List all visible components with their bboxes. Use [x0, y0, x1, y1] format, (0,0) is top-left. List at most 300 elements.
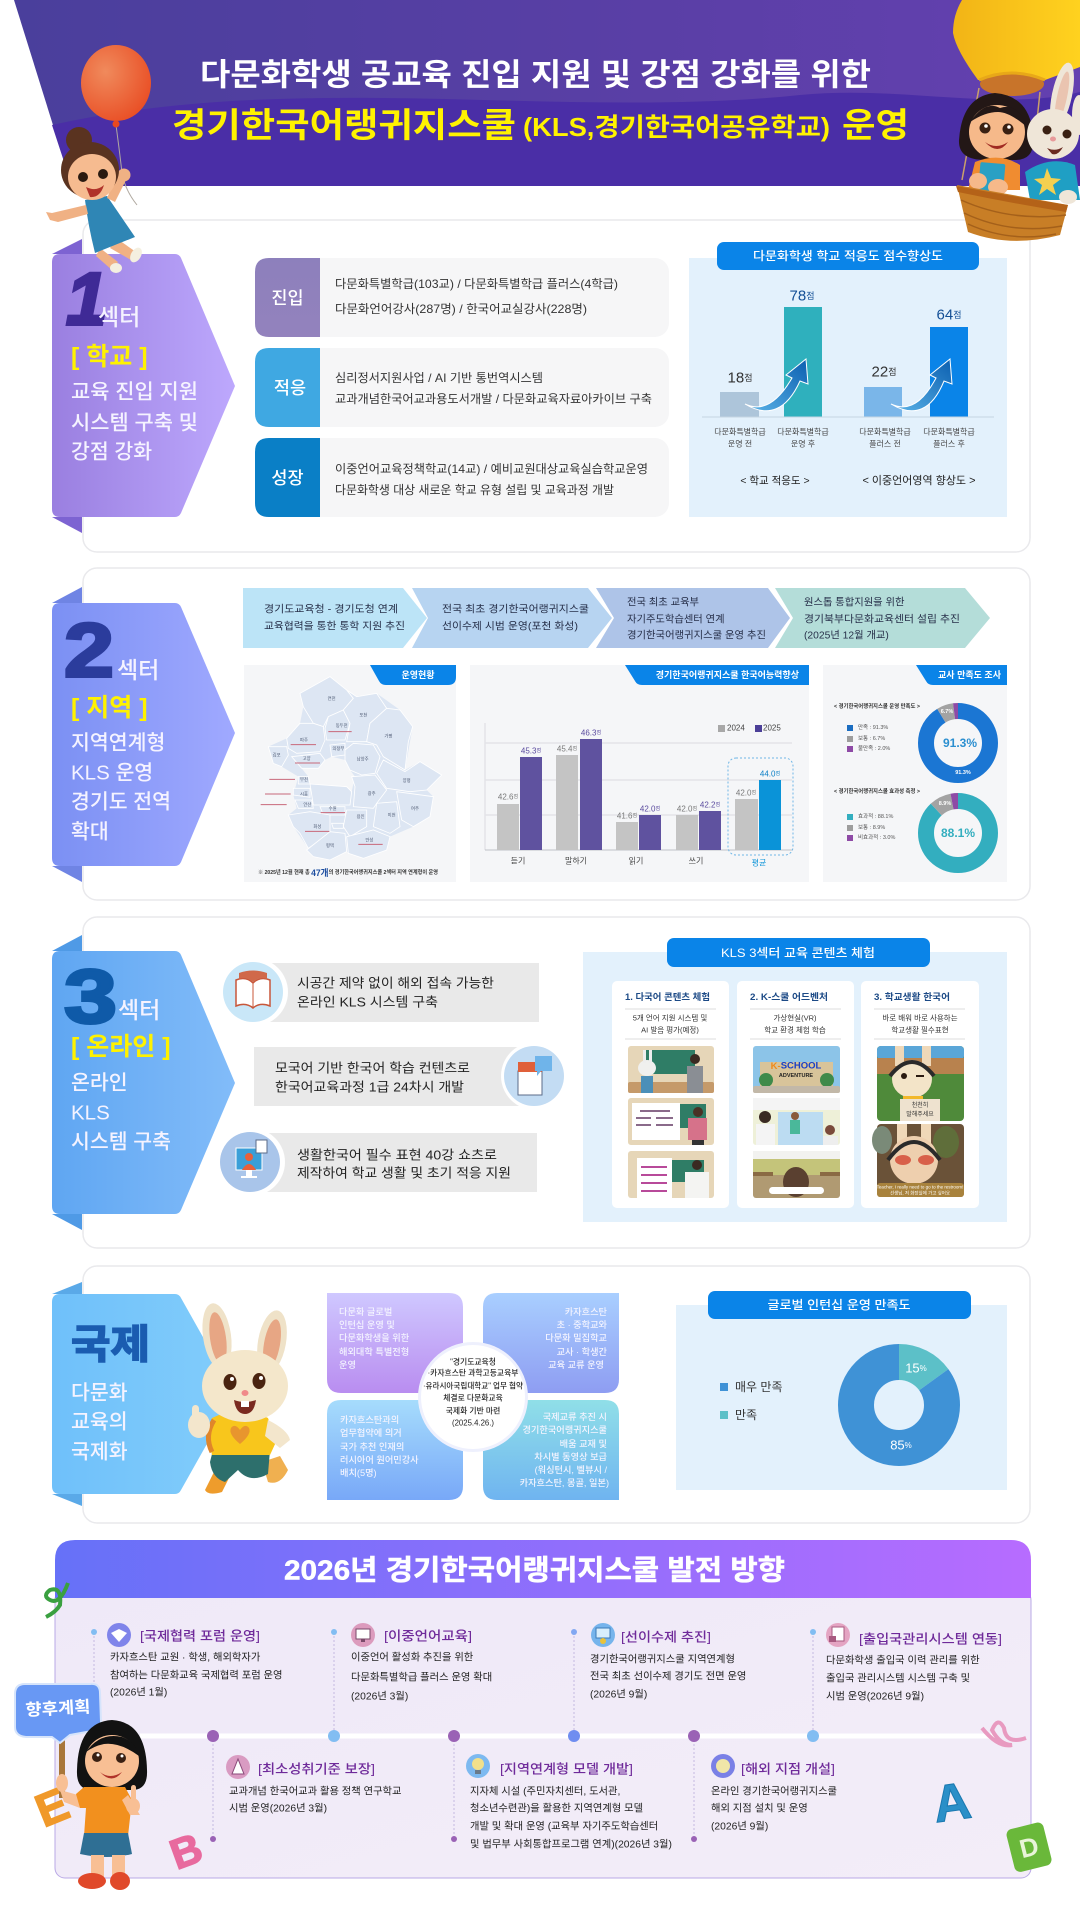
sign: future plan: [15, 1684, 101, 1798]
center agreement circle: (2025.4.26.): [452, 1418, 494, 1428]
short video 2: [872, 1124, 964, 1197]
map of Gyeonggi: 이천: [388, 811, 396, 818]
tag: [625, 665, 809, 685]
illustration: pink ribbon: [982, 1722, 1026, 1745]
quadrant: bottom right: [483, 1400, 619, 1500]
arrow: growth 1: [745, 359, 808, 411]
quadrant: top right: [483, 1293, 619, 1393]
illustration: balloon girl: [46, 45, 151, 273]
icon: box and chat: [518, 1056, 552, 1095]
bars: listening: [497, 746, 542, 866]
sector tag: [ 온라인 ]: [71, 1033, 171, 1061]
survey 1 heading: < 경기한국어랭귀지스쿨 운영 만족도 >: [834, 702, 921, 710]
sign: future plan: 향후계획: [25, 1697, 91, 1720]
panel title: KLS 3섹터 교육 콘텐츠 체험: [721, 945, 875, 960]
row: 진입: 다문화언어강사(287명) / 한국어교실강사(228명): [335, 302, 587, 316]
map of Gyeonggi: 가평: [384, 732, 392, 739]
map of Gyeonggi: 부천: [300, 776, 308, 783]
bars: average highlight: 평균: [752, 858, 766, 868]
bars: writing: [676, 800, 721, 866]
bars: speaking: 말하기: [565, 856, 587, 866]
bar labels: 다문화특별학급: [923, 426, 975, 436]
short video 1: 천천히: [912, 1101, 928, 1109]
sector description: [71, 732, 171, 844]
map of Gyeonggi: 연천: [328, 695, 336, 701]
survey 1 legend: 보통 : 6.7%: [858, 735, 885, 742]
panel: sector 2 card: [83, 568, 1030, 900]
plan: prerequisite: 전국 최초 선이수제 경기도 전면 운영: [590, 1670, 746, 1682]
quadrant: top right: 카자흐스탄: [565, 1307, 608, 1317]
quadrant: top right: 교사 · 학생간: [557, 1346, 608, 1357]
bar values: 22점: [872, 364, 896, 380]
sector 1 arrow label: [52, 239, 235, 533]
center agreement circle: ·카자흐스탄 과학고등교육부: [428, 1368, 518, 1378]
plan: forum: 참여하는 다문화교육 국제협력 포럼 운영: [110, 1668, 282, 1682]
game thumbnail 1: ADVENTURE: [779, 1073, 813, 1079]
sector description: KLS 운영: [71, 762, 153, 784]
chart captions: < 이중언어영역 향상도 >: [862, 474, 976, 487]
tag: 운영현황: [401, 669, 435, 680]
plan: prerequisite: [590, 1623, 746, 1700]
bar labels: 플러스 후: [933, 440, 965, 448]
sector number 1: 1: [66, 258, 107, 340]
chevron 1: [243, 588, 427, 648]
section header: 2026년 경기한국어랭귀지스쿨 발전 방향: [284, 1554, 785, 1586]
plan: immigration: [826, 1623, 1002, 1702]
quadrant diagram: [327, 1293, 619, 1500]
chevron 2: [412, 588, 612, 648]
bar values: [728, 288, 961, 386]
plan: bilingual: [이중언어교육]: [384, 1628, 472, 1644]
plan: forum: [국제협력 포럼 운영]: [140, 1628, 260, 1644]
quadrant: bottom left: 러시아어 원어민강사: [340, 1454, 419, 1465]
bars: reading: 41.6점: [617, 812, 637, 820]
bars: writing: 쓰기: [689, 856, 703, 866]
plan: regional model: 개발 및 확대 운영 (교육부 자기주도학습센터: [470, 1820, 658, 1832]
quadrant: bottom left: 국가 추천 인재의: [340, 1441, 404, 1452]
header banner: [14, 0, 1080, 186]
quadrant: bottom left: 카자흐스탄과의: [340, 1415, 399, 1425]
letter B block: B: [164, 1824, 208, 1878]
card 1: 5개 언어 지원 시스템 및: [633, 1012, 707, 1022]
card 2: 가상현실(VR): [773, 1012, 817, 1022]
bars: speaking: [556, 728, 602, 866]
quadrant: top right: 다문화 밀집학교: [545, 1332, 607, 1343]
center agreement circle: "경기도교육청: [450, 1356, 496, 1366]
chart title pill: [717, 242, 979, 270]
legend: 매우 만족: [735, 1380, 782, 1394]
chevron 1: 교육협력을 통한 통학 지원 추진: [264, 620, 405, 632]
map of Gyeonggi: 남양주: [357, 755, 369, 762]
sector description: 확대: [71, 820, 109, 844]
bars: average highlight: [728, 758, 793, 868]
donut chart: 85%: [890, 1438, 912, 1452]
plan: overseas branch: [711, 1754, 837, 1832]
quadrant: bottom right: 국제교류 추진 시: [543, 1412, 607, 1422]
panel title: [708, 1291, 971, 1319]
online item 3: 생활한국어 필수 표현 40강 쇼츠로: [297, 1148, 497, 1162]
map of Gyeonggi: 양평: [403, 777, 411, 783]
sector description: [71, 1382, 128, 1464]
chart grid: [485, 723, 792, 850]
panel title: 글로벌 인턴십 운영 만족도: [768, 1298, 910, 1312]
survey 2 heading: < 경기한국어랭귀지스쿨 효과성 측정 >: [834, 787, 921, 795]
icon: handshake: [107, 1623, 131, 1647]
bars: speaking: 45.4점: [557, 744, 577, 754]
online item 2: 모국어 기반 한국어 학습 컨텐츠로: [275, 1060, 470, 1076]
row: 진입: 다문화특별학급(103교) / 다문화특별학급 플러스(4학급): [335, 277, 618, 291]
panel: 2026 development direction: [55, 1540, 1031, 1878]
bars: [702, 307, 994, 417]
chevron 1: 경기도교육청 - 경기도청 연계: [264, 602, 398, 616]
chevron 4: (2025년 12월 개교): [804, 630, 889, 642]
map of Gyeonggi: 수원: [329, 805, 337, 812]
plan: forum: [107, 1623, 282, 1698]
row: 진입: 진입: [271, 288, 304, 308]
bar labels: 다문화특별학급: [714, 426, 766, 436]
plan: overseas branch: [해외 지점 개설]: [741, 1762, 835, 1776]
card 2: 2. K-스쿨 어드벤처: [750, 991, 828, 1002]
sector tag: [ 학교 ]: [71, 343, 148, 371]
row: 성장: [255, 438, 669, 517]
plan: regional model: 및 법무부 사회통합프로그램 연계)(2026년 3월): [470, 1838, 672, 1850]
sector description: 다문화: [71, 1382, 128, 1404]
sector description: 경기도 전역: [71, 790, 171, 814]
bar values: 18점: [728, 370, 752, 386]
heading 국제: 국제: [71, 1323, 150, 1367]
letter D block: [1005, 1821, 1053, 1873]
row: 성장: 성장: [271, 468, 304, 488]
quadrant: top right: 교육 교류 운영: [548, 1360, 604, 1370]
quadrant: bottom right: 차시별 동영상 보급: [534, 1451, 608, 1462]
international arrow label: [52, 1282, 235, 1506]
sector description: KLS: [71, 1102, 110, 1124]
title line 2: (KLS,경기한국어공유학교): [523, 114, 830, 142]
donut chart 1: 6.7%: [941, 709, 953, 715]
sector description: [71, 380, 198, 464]
panel: teacher satisfaction: [823, 665, 1007, 882]
short video 1: 말해주세요: [906, 1110, 934, 1118]
bars: reading: 읽기: [629, 856, 643, 866]
bar labels: [714, 426, 975, 448]
donut chart 2: [926, 801, 990, 865]
plan: regional model: 지자체 시설 (주민자치센터, 도서관,: [470, 1786, 620, 1798]
chevron 2: 선이수제 시범 운영(포천 화성): [442, 620, 578, 632]
short video 2: Teacher, I really need to go to the restroom!: [877, 1184, 963, 1190]
icon: system: [826, 1623, 850, 1647]
donut chart: [856, 1360, 942, 1452]
sector word: 섹터: [118, 997, 160, 1023]
sector number 3: 3: [64, 954, 117, 1040]
plan: regional model: 청소년수련관)을 활용한 지역연계형 모델: [470, 1802, 643, 1814]
quadrant: top left: 다문화학생을 위한: [339, 1332, 410, 1343]
timeline: [91, 1629, 995, 1842]
map footnote: ※ 2025년 12월 현재 총 47개의 경기한국어랭귀지스쿨 2섹터 지역 연계형이 운영: [258, 867, 438, 878]
survey 2 legend: 비효과적 : 3.0%: [858, 833, 895, 841]
icon: certificate: [591, 1623, 615, 1647]
map of Gyeonggi: 용인: [357, 813, 365, 819]
quadrant: top left: [327, 1293, 463, 1393]
plan: bilingual: 이중언어 활성화 추진을 위한: [351, 1650, 474, 1664]
panel: operating status map: [244, 665, 456, 882]
survey 2 legend: 효과적 : 88.1%: [858, 812, 893, 820]
map of Gyeonggi: [261, 677, 442, 860]
sector description: 온라인: [71, 1072, 128, 1094]
plan: forum: (2026년 1월): [110, 1686, 167, 1698]
bar labels: 다문화특별학급: [777, 426, 829, 436]
letter A block: A: [929, 1772, 975, 1834]
bars: reading: [616, 804, 661, 866]
quadrant: bottom left: [327, 1400, 463, 1500]
card 1: [612, 981, 729, 1208]
chart legend: [718, 724, 781, 732]
sector word: 섹터: [117, 657, 159, 683]
icon: monitor: [236, 1140, 267, 1178]
row: 적응: 심리정서지원사업 / AI 기반 통번역시스템: [335, 371, 543, 385]
center agreement circle: 체결로 다문화교육: [443, 1392, 503, 1402]
map of Gyeonggi: 여주: [411, 805, 419, 812]
online item 3: [217, 1128, 537, 1196]
arrow: growth 2: [891, 359, 952, 411]
card 1: AI 발음 평가(예정): [641, 1024, 699, 1034]
title line 1: 다문화학생 공교육 진입 지원 및 강점 강화를 위한: [200, 58, 871, 92]
panel: sector 1 card: [83, 220, 1030, 552]
plan: minimum achievement: [226, 1755, 402, 1814]
survey 1 legend: 만족 : 91.3%: [858, 723, 888, 731]
plan: bilingual: (2026년 3월): [351, 1690, 408, 1702]
icon: board: [351, 1623, 375, 1647]
game thumbnail 2: [753, 1098, 840, 1145]
quadrant: bottom right: (워싱턴시, 벨뷰시 /: [535, 1464, 607, 1475]
video thumbnail 2: [628, 1098, 714, 1145]
illustration: hot air balloon with girl and rabbit: [953, 0, 1080, 241]
bars: listening: 42.6점: [498, 792, 518, 802]
chevron 4: [775, 588, 990, 648]
chart captions: [740, 474, 976, 487]
map of Gyeonggi: 광주: [368, 790, 376, 797]
donut chart: 15%: [905, 1360, 927, 1376]
panel: score chart: [689, 242, 1007, 517]
donut chart 1: [926, 709, 990, 776]
sector tag: [ 지역 ]: [71, 694, 148, 722]
plan: minimum achievement: 교과개념 한국어교과 활용 정책 연구학교: [229, 1784, 402, 1798]
row: 적응: [255, 348, 669, 427]
online item 2: 한국어교육과정 1급 24차시 개발: [275, 1080, 464, 1094]
card 3: 바로 배워 바로 사용하는: [882, 1012, 958, 1022]
quadrant: bottom left: 업무협약에 의거: [340, 1427, 402, 1438]
bar values: 78점: [790, 288, 814, 304]
plan: immigration: 출입국 관리시스템 시스템 구축 및: [826, 1672, 970, 1684]
bars: average highlight: 42.0점: [736, 788, 756, 798]
sector number 2: 2: [64, 608, 114, 694]
center agreement circle: [418, 1342, 528, 1452]
online item 2: [254, 1042, 569, 1110]
video thumbnail 1: [628, 1046, 714, 1093]
bar values: 64점: [937, 306, 961, 324]
row: 적응: 교과개념한국어교과용도서개발 / 다문화교육자료아카이브 구축: [335, 392, 652, 406]
title line 2: [172, 107, 909, 145]
panel: international card: [83, 1266, 1030, 1523]
short video 1: [877, 1046, 964, 1121]
rows: stages: [255, 258, 669, 517]
plan: immigration: [출입국관리시스템 연동]: [859, 1632, 1002, 1646]
online item 1: 시공간 제약 없이 해외 접속 가능한: [297, 976, 494, 990]
chevron 3: 전국 최초 교육부: [627, 596, 699, 608]
bar labels: 운영 전: [728, 438, 752, 448]
bars: writing: 42.0점: [677, 804, 697, 814]
sector description: 교육 진입 지원: [71, 380, 198, 404]
chevron 3: 경기한국어랭귀지스쿨 운영 추진: [627, 628, 766, 642]
bars: writing: 42.2점: [700, 800, 720, 810]
survey 1 legend: 불만족 : 2.0%: [858, 744, 890, 752]
row: 성장: 이중언어교육정책학교(14교) / 예비교원대상교육실습학교운영: [335, 461, 648, 476]
bars: speaking: 46.3점: [581, 728, 601, 738]
chevron 2: 전국 최초 경기한국어랭귀지스쿨: [442, 602, 589, 616]
card 2: 학교 환경 체험 학습: [764, 1024, 826, 1034]
card 3: 학교생활 필수표현: [891, 1024, 949, 1034]
plan: regional model: [466, 1754, 672, 1850]
quadrant: top left: 해외대학 특별전형: [339, 1346, 409, 1357]
row: 진입: [255, 258, 669, 337]
map of Gyeonggi: 안성: [365, 836, 373, 842]
icon: light bulb: [466, 1754, 490, 1778]
donut chart 1: 91.3%: [955, 770, 971, 776]
map of Gyeonggi: 파주: [300, 736, 308, 743]
plan: minimum achievement: [최소성취기준 보장]: [258, 1762, 375, 1776]
bar labels: 플러스 전: [869, 438, 901, 448]
map of Gyeonggi: 고양: [303, 755, 311, 761]
survey 2 legend: 보통 : 8.9%: [858, 824, 885, 831]
short video 2: 선생님, 저 화장실에 가고 싶어요: [890, 1190, 950, 1196]
chart title pill: 다문화학생 학교 적응도 점수향상도: [753, 248, 943, 263]
plan: prerequisite: (2026년 9월): [590, 1688, 647, 1700]
plan: overseas branch: 해외 지점 설치 및 운영: [711, 1802, 808, 1814]
bars: listening: 듣기: [511, 856, 525, 866]
plan: overseas branch: (2026년 9월): [711, 1820, 768, 1832]
plan: immigration: 다문화학생 출입국 이력 관리를 위한: [826, 1654, 980, 1666]
card 3: 3. 학교생활 한국어: [874, 991, 950, 1002]
plan: minimum achievement: 시범 운영(2026년 3월): [229, 1802, 327, 1814]
plan: forum: 카자흐스탄 교원 · 학생, 해외학자가: [110, 1650, 261, 1664]
sector description: 시스템 구축 및: [71, 412, 198, 434]
plan: regional model: [지역연계형 모델 개발]: [500, 1762, 633, 1776]
card 3: [861, 981, 979, 1208]
chart captions: < 학교 적응도 >: [740, 475, 810, 487]
plan: bilingual: 다문화특별학급 플러스 운영 확대: [351, 1672, 492, 1684]
chevrons: regional steps: [243, 588, 990, 648]
plan: prerequisite: 경기한국어랭귀지스쿨 지역연계형: [590, 1652, 735, 1666]
chevron 4: 원스톱 통합지원을 위한: [804, 596, 905, 608]
bars: listening: 45.3점: [521, 746, 541, 756]
quadrant: bottom left: 배치(5명): [340, 1467, 377, 1478]
game thumbnail 1: [753, 1046, 840, 1093]
icon: open book: [236, 970, 270, 1008]
panel: internship satisfaction: [676, 1291, 1007, 1490]
online item 1: [220, 958, 539, 1026]
quadrant: top left: 운영: [339, 1360, 356, 1370]
chevron 3: [596, 588, 790, 648]
online item 3: 제작하여 학교 생활 및 초기 적응 지원: [297, 1166, 511, 1180]
map of Gyeonggi: 시흥: [300, 790, 308, 796]
illustration: rabbit mascot: [188, 1301, 291, 1494]
map of Gyeonggi: 화성: [313, 823, 321, 830]
map of Gyeonggi: 포천: [359, 711, 367, 717]
tag: 경기한국어랭귀지스쿨 한국어능력향상: [656, 669, 800, 680]
survey 1 legend: [847, 723, 890, 752]
donut chart 1: 91.3%: [943, 736, 977, 750]
legend: [720, 1380, 782, 1422]
title line 2: 운영: [842, 107, 909, 145]
sector word: 섹터: [98, 304, 140, 330]
panel: language ability bar chart: [470, 665, 809, 882]
bar labels: 운영 후: [791, 438, 815, 448]
icon: scale: [226, 1755, 250, 1779]
quadrant: top left: 인턴십 운영 및: [339, 1319, 395, 1330]
letter D block: D: [1016, 1830, 1042, 1864]
game thumbnail 1: K-SCHOOL: [771, 1060, 822, 1072]
sector description: 교육의: [71, 1410, 128, 1434]
plan: overseas branch: 온라인 경기한국어랭귀지스쿨: [711, 1784, 837, 1798]
chart legend: 2025: [763, 724, 781, 732]
row: 적응: 적응: [274, 378, 306, 398]
chevron 4: 경기북부다문화교육센터 설립 추진: [804, 612, 960, 626]
legend: 만족: [735, 1408, 757, 1422]
survey 2 legend: [847, 812, 895, 841]
sector description: 시스템 구축: [71, 1130, 171, 1154]
sector description: 지역연계형: [71, 732, 165, 754]
online item 1: 온라인 KLS 시스템 구축: [297, 994, 438, 1010]
map of Gyeonggi: 안산: [303, 801, 311, 807]
map of Gyeonggi: 평택: [326, 842, 334, 849]
bars: reading: 42.0점: [640, 804, 660, 814]
section header: [55, 1540, 1031, 1598]
center agreement circle: ·유라시아국립대학교" 업무 협약: [423, 1380, 523, 1390]
map of Gyeonggi: 의정부: [332, 745, 344, 752]
panel title: [667, 938, 930, 967]
title line 2: 경기한국어랭귀지스쿨: [172, 107, 516, 145]
plan: prerequisite: [선이수제 추진]: [621, 1630, 711, 1644]
quadrant: bottom right: 경기한국어랭귀지스쿨: [522, 1424, 607, 1435]
video thumbnail 3: [628, 1151, 714, 1198]
plan: immigration: 시범 운영(2026년 9월): [826, 1690, 924, 1702]
illustration: green ribbon: [46, 1583, 68, 1617]
donut chart 2: 88.1%: [941, 826, 975, 840]
sector 2 arrow label: [52, 587, 235, 882]
card 2: [737, 981, 854, 1208]
sector description: 강점 강화: [71, 440, 152, 464]
sector description: [71, 1072, 171, 1154]
quadrant: bottom right: 배움 교재 및: [560, 1438, 607, 1449]
donut chart 2: 8.9%: [939, 801, 951, 807]
panel: sector 3 card: [83, 917, 1030, 1248]
quadrant: top left: 다문화 글로벌: [339, 1306, 392, 1317]
card 1: 1. 다국어 콘텐츠 체험: [625, 991, 710, 1002]
sector description: 국제화: [71, 1440, 128, 1464]
game thumbnail 3: [753, 1151, 840, 1198]
tag: [370, 665, 456, 685]
center agreement circle: 국제화 기반 마련: [446, 1406, 500, 1416]
icon: globe: [711, 1754, 735, 1778]
quadrant: bottom right: 카자흐스탄, 몽골, 일본): [520, 1477, 609, 1488]
chevron 3: 자기주도학습센터 연계: [627, 614, 725, 626]
tag: 교사 만족도 조사: [938, 670, 1002, 680]
illustration: girl with sign: [15, 1684, 147, 1890]
map of Gyeonggi: 김포: [273, 751, 281, 757]
bars: average highlight: 44.0점: [760, 770, 780, 778]
plan: bilingual: [351, 1623, 492, 1702]
sector 3 arrow label: [52, 935, 235, 1230]
map of Gyeonggi: 동두천: [336, 722, 348, 729]
